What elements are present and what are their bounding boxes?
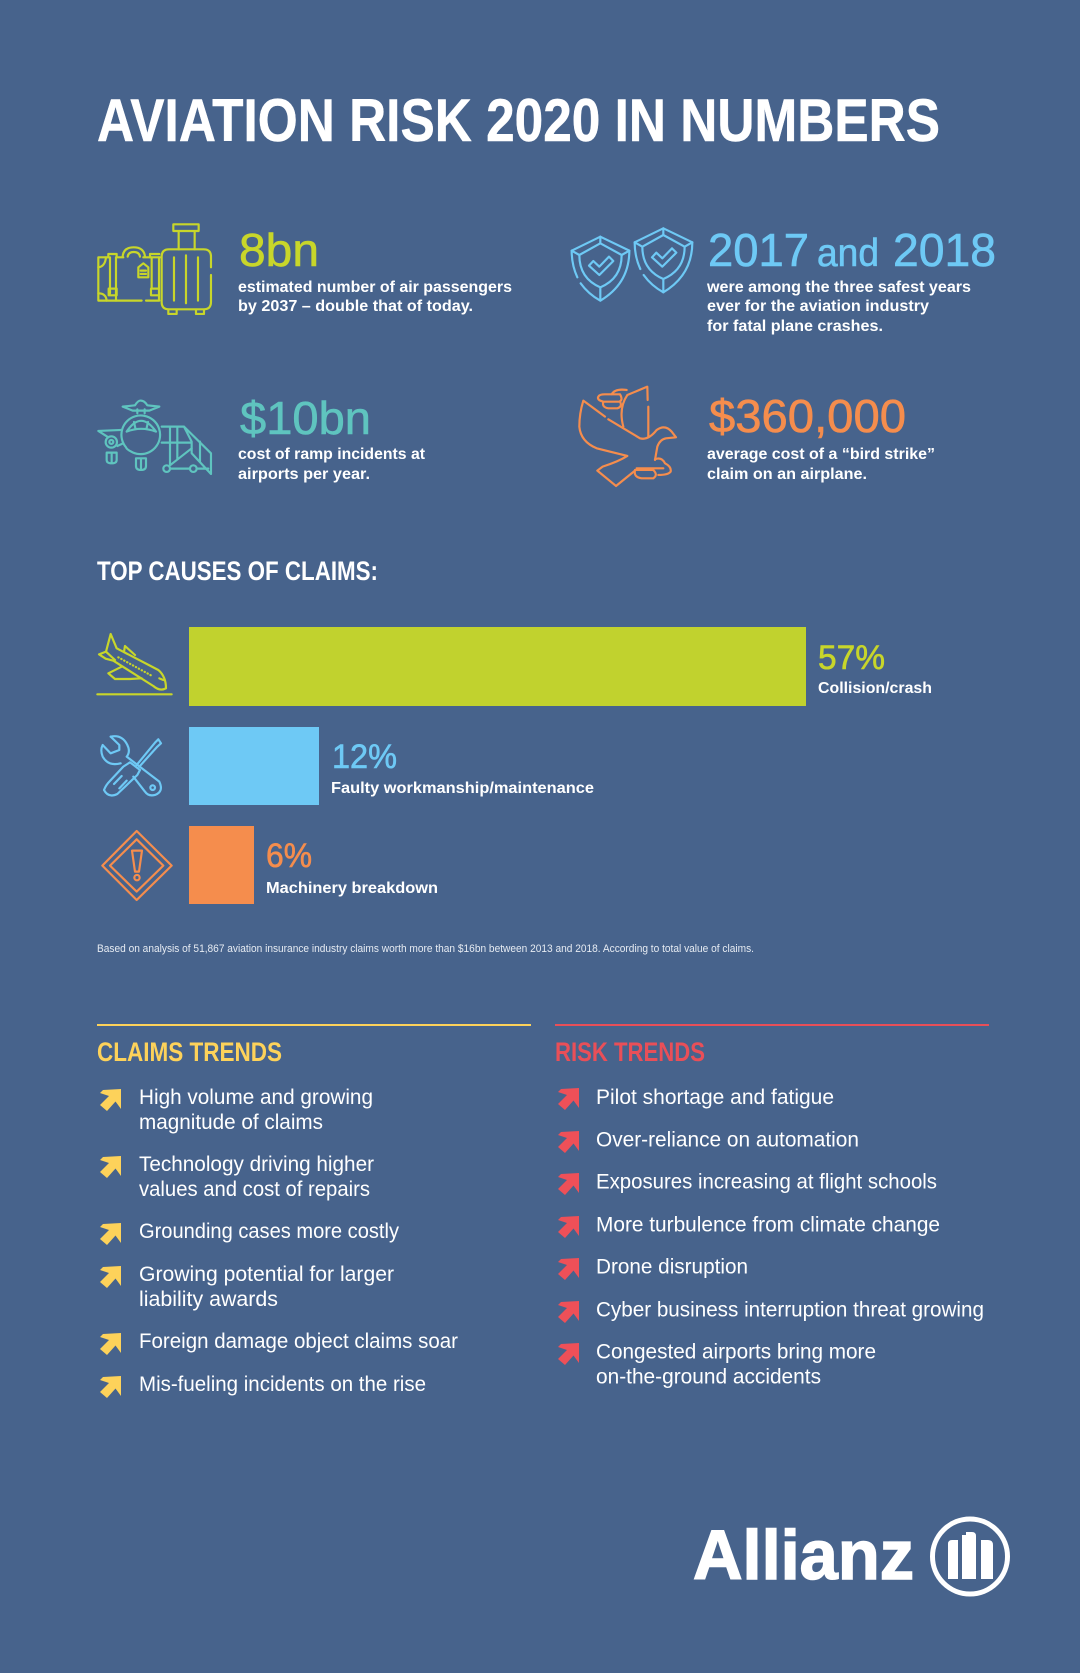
description: bird strike (707, 446, 935, 483)
list: risk trends: Drone disruption (596, 1256, 748, 1278)
stat: 8bn: 8bn (239, 224, 319, 276)
panel: safest years (572, 224, 996, 335)
label: workmanship: Faulty workmanship/maintenance (331, 780, 594, 797)
heading: risk trends: RISK TRENDS (555, 1037, 705, 1067)
list: claims trends (139, 1086, 458, 1396)
stat: 2017 and 2018: 2017 (708, 224, 809, 276)
stat: $360,000: $360,000 (709, 390, 906, 442)
description: safest years: ever for the aviation industry (707, 298, 929, 315)
bar chart: top causes (97, 627, 932, 904)
list: claims trends: Foreign damage object claims soar (139, 1330, 458, 1353)
bar row: workmanship (101, 727, 594, 805)
icon: bird with coins (579, 387, 676, 486)
stat: 2017 and 2018: 2018 (893, 224, 996, 276)
footnote: Based on analysis of 51,867 aviation insurance industry claims worth more than $16bn between 2013 and 2018. According to total value of claims. (97, 943, 754, 955)
description: bird strike: claim on an airplane. (707, 466, 867, 483)
value: 6%: 6% (266, 837, 312, 875)
icon: shields (572, 228, 692, 301)
value: 12%: 12% (332, 738, 397, 776)
logo: Allianz: Allianz (693, 1516, 914, 1594)
arrows: claims (100, 1089, 121, 1398)
list: claims trends: liability awards (139, 1288, 278, 1311)
panel: ramp incidents (98, 392, 425, 483)
list: claims trends: Growing potential for larger (139, 1263, 394, 1286)
description: safest years (706, 279, 971, 335)
icon: plane and stairs (98, 401, 211, 474)
panel: 8bn air passengers (98, 224, 512, 315)
description: ramp incidents (238, 446, 425, 483)
list: risk trends: Cyber business interruption threat growing (596, 1298, 984, 1322)
list: claims trends: Technology driving higher (139, 1153, 374, 1176)
arrows: risk (558, 1088, 579, 1365)
panel: bird strike (579, 387, 935, 486)
stat: 2017 and 2018 (708, 224, 996, 276)
description: safest years: were among the three safest years (706, 279, 971, 296)
description: 8bn: by 2037 – double that of today. (238, 298, 473, 315)
list: risk trends (596, 1086, 984, 1388)
list: risk trends: Exposures increasing at flight schools (596, 1170, 937, 1194)
description: bird strike: average cost of a “bird strike” (707, 446, 935, 463)
label: machinery: Machinery breakdown (266, 880, 438, 897)
icon: crashing plane (97, 634, 172, 694)
stat: 2017 and 2018: and (817, 232, 879, 275)
bar: 12% (189, 727, 319, 805)
description: ramp incidents: airports per year. (238, 466, 370, 483)
panel: risk trends (555, 1024, 989, 1388)
list: risk trends: More turbulence from climate change (596, 1214, 940, 1236)
icon: wrench and screwdriver (101, 736, 161, 795)
bar: 57% (189, 627, 806, 706)
label: collision: Collision/crash (818, 680, 932, 697)
list: claims trends: magnitude of claims (139, 1111, 323, 1134)
description: 8bn (238, 279, 512, 315)
title: AVIATION RISK 2020 IN NUMBERS (97, 87, 940, 154)
bar row: collision (97, 627, 932, 706)
icon: luggage (98, 224, 211, 314)
list: claims trends: High volume and growing (139, 1086, 373, 1109)
stat: $10bn: $10bn (240, 392, 371, 444)
list: claims trends: Grounding cases more costly (139, 1220, 399, 1243)
description: ramp incidents: cost of ramp incidents at (238, 446, 425, 463)
description: 8bn: estimated number of air passengers (238, 279, 512, 296)
list: risk trends: Pilot shortage and fatigue (596, 1086, 834, 1109)
list: risk trends: Over-reliance on automation (596, 1128, 859, 1152)
panel: claims trends (97, 1024, 531, 1398)
icon: warning diamond (102, 831, 172, 900)
heading: claims trends: CLAIMS TRENDS (97, 1037, 282, 1067)
description: safest years: for fatal plane crashes. (707, 318, 883, 335)
bar row: machinery (102, 826, 438, 904)
list: claims trends: Mis-fueling incidents on the rise (139, 1373, 426, 1396)
bar: 6% (189, 826, 254, 904)
value: 57%: 57% (818, 639, 885, 677)
list: claims trends: values and cost of repairs (139, 1178, 370, 1201)
heading: top causes: TOP CAUSES OF CLAIMS: (97, 556, 378, 586)
list: risk trends: on-the-ground accidents (596, 1366, 821, 1388)
list: risk trends: Congested airports bring more (596, 1340, 876, 1364)
